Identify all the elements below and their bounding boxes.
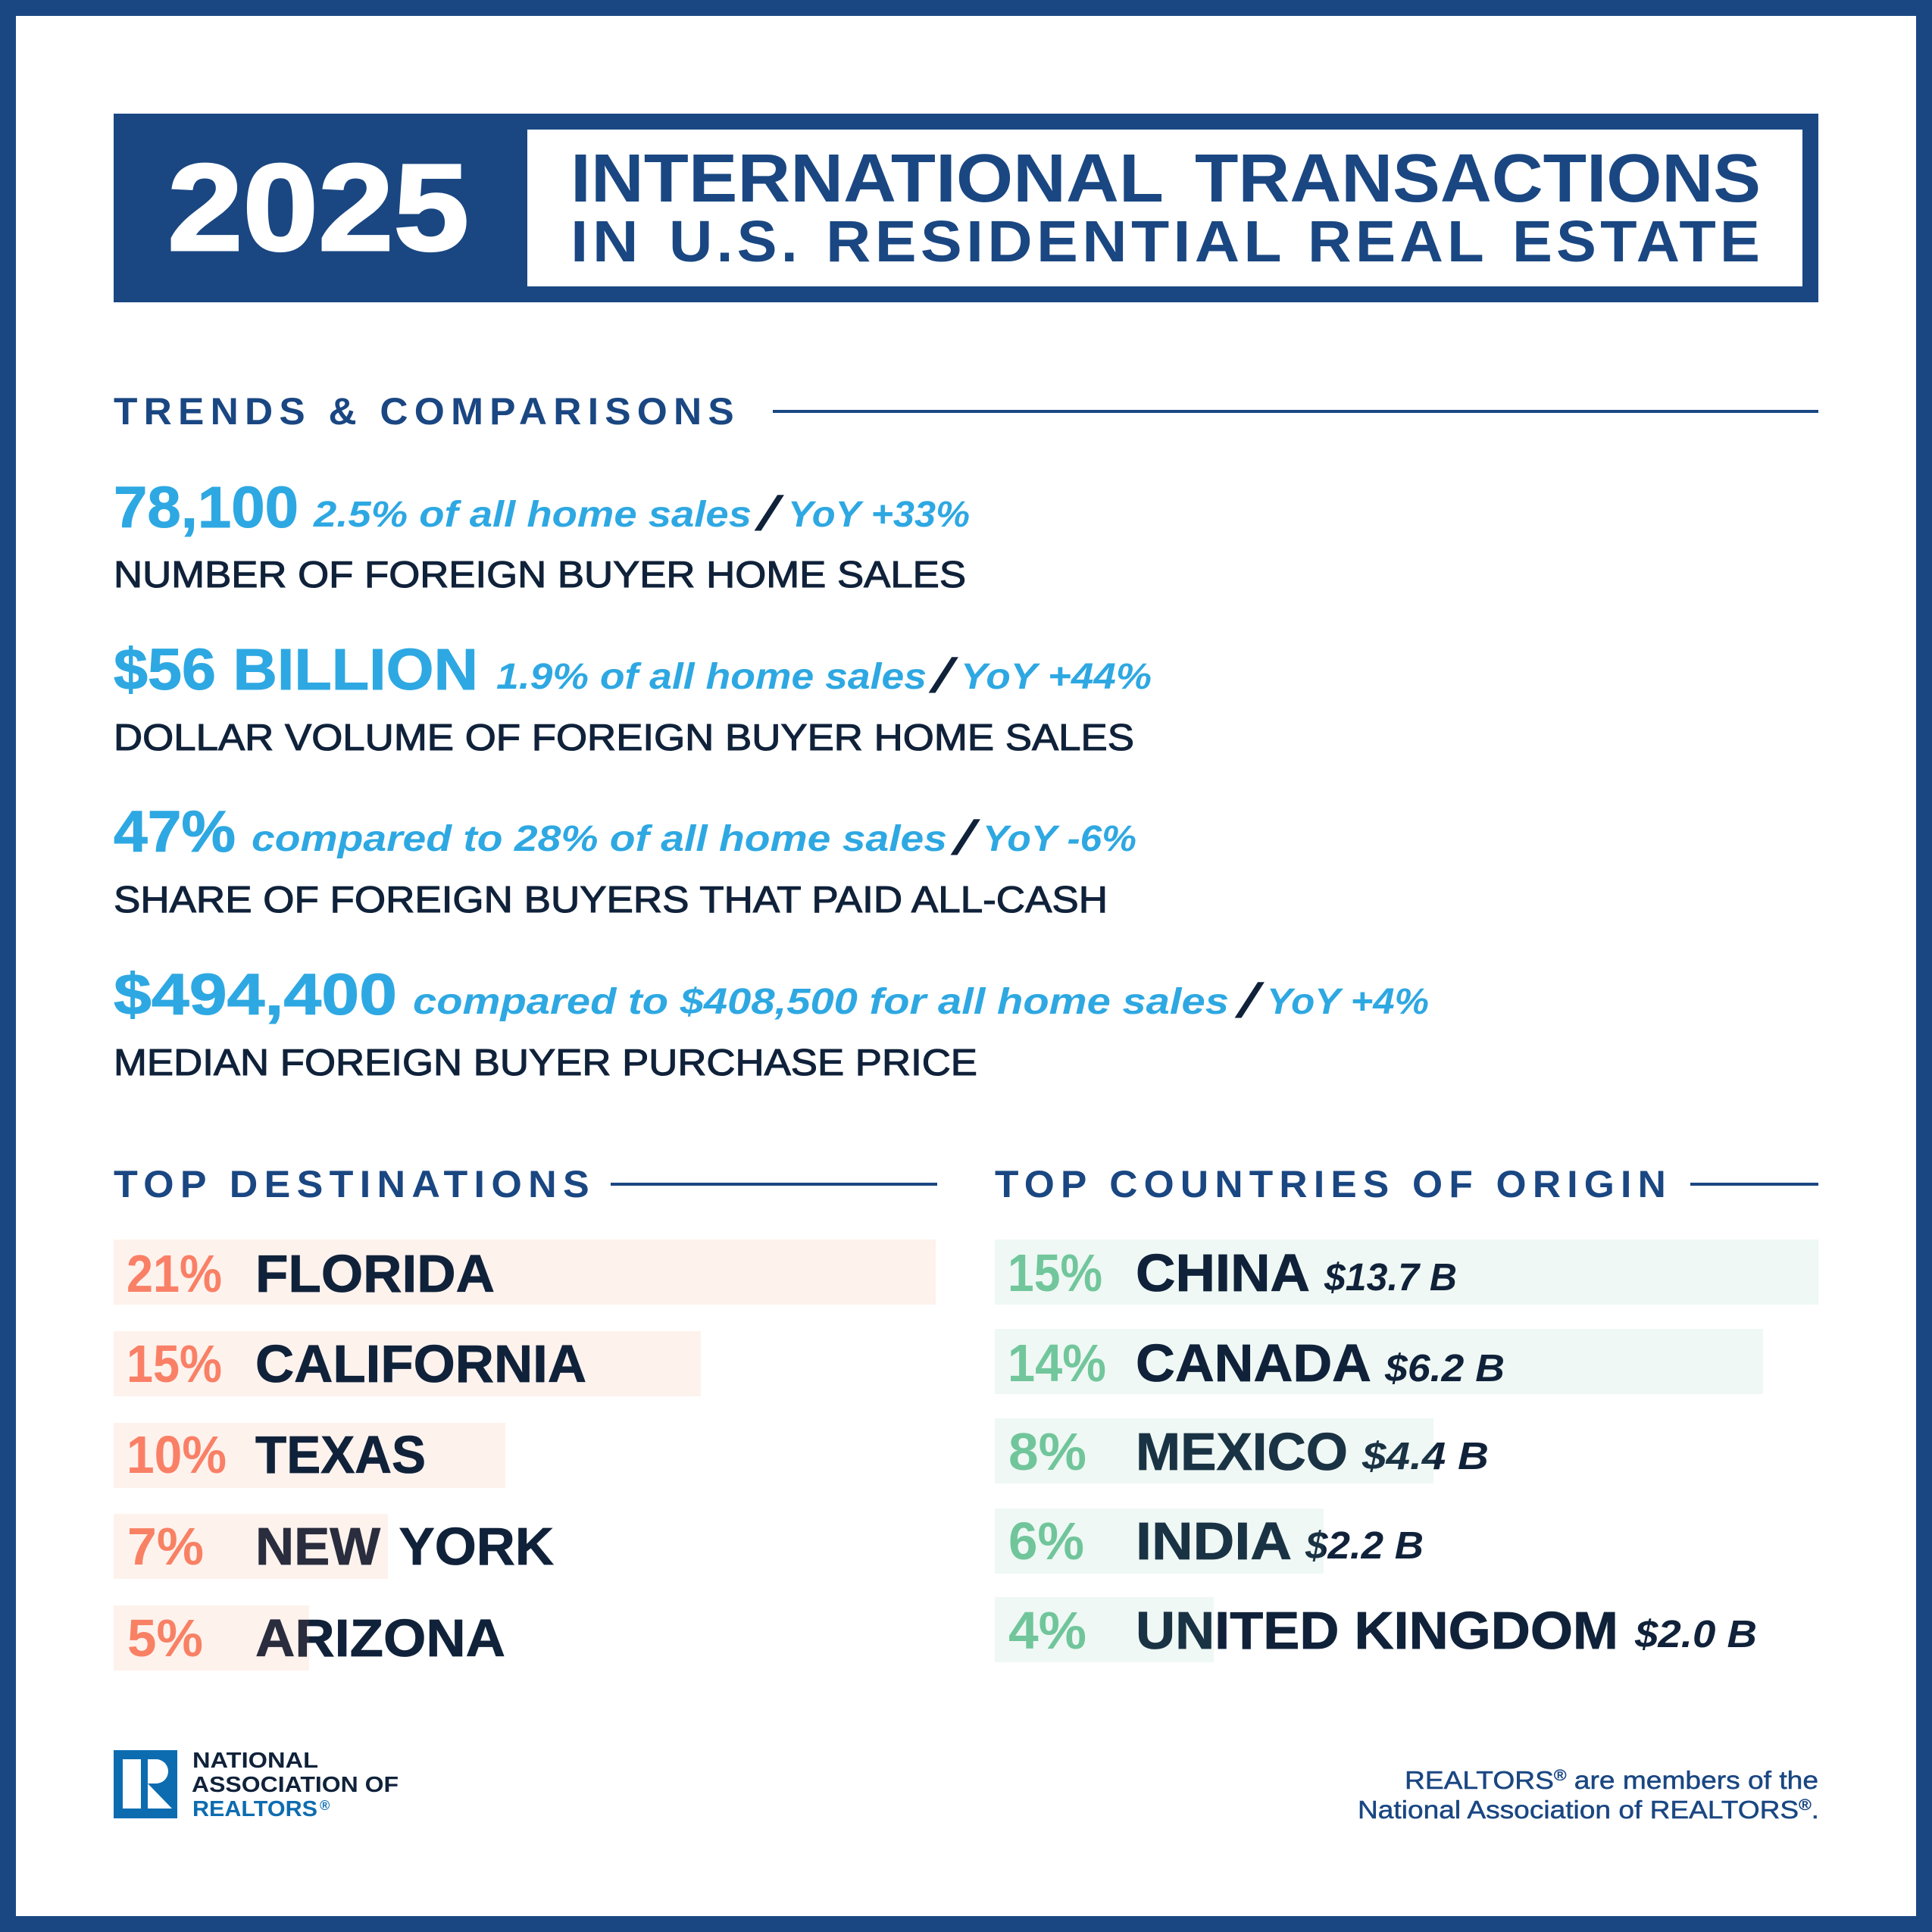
bar: California: CALIFORNIA	[255, 1334, 586, 1393]
stat: all-cash share: 47%	[114, 799, 236, 864]
footer note: ®	[1554, 1768, 1567, 1784]
bar: United Kingdom: 4%	[1008, 1601, 1086, 1660]
bar: Texas: 10%	[127, 1425, 227, 1484]
title line 1: INTERNATIONAL	[571, 141, 1164, 217]
bar: Florida	[114, 1240, 936, 1305]
footer note: ®	[1799, 1797, 1812, 1814]
stat: dollar volume: YoY +44%	[961, 657, 1152, 697]
logo wordmark	[192, 1749, 399, 1821]
title line 1	[571, 141, 1761, 217]
logo wordmark: ASSOCIATION OF	[192, 1773, 399, 1797]
stat: dollar volume	[114, 637, 1152, 758]
bar: Canada: CANADA	[1136, 1333, 1371, 1393]
stat: median purchase price: /	[1235, 975, 1264, 1027]
bar: India	[995, 1508, 1424, 1574]
section: trends and comparisons	[114, 390, 1818, 1083]
footer note: REALTORS	[1405, 1766, 1537, 1794]
bar: Arizona	[114, 1605, 505, 1671]
bar: United Kingdom: $2.0 B	[1634, 1612, 1757, 1655]
bar: California: 15%	[127, 1334, 222, 1393]
bar: Texas: TEXAS	[255, 1425, 426, 1484]
bar: Canada	[995, 1329, 1763, 1394]
bar: Mexico	[995, 1418, 1489, 1483]
footer note	[1358, 1766, 1819, 1824]
stat: foreign buyer home sales	[114, 475, 970, 596]
banner background	[114, 114, 1818, 302]
stat: all-cash share: /	[951, 812, 980, 864]
bar: China: $13.7 B	[1324, 1255, 1457, 1299]
stat: median purchase price: compared to $408,500 for all home sales	[413, 982, 1229, 1022]
bar: California	[114, 1331, 701, 1396]
logo: National Association of Realtors	[114, 1749, 399, 1821]
bar: China: CHINA	[1136, 1243, 1310, 1302]
title line 2: U.S.	[669, 209, 802, 274]
stat: dollar volume: 1.9% of all home sales	[496, 657, 927, 697]
title line 2: IN	[571, 209, 642, 274]
stat: median purchase price: $494,400	[114, 962, 397, 1027]
bar: New York: NEW YORK	[255, 1517, 554, 1576]
stat: median purchase price: MEDIAN FOREIGN BUYER PURCHASE PRICE	[114, 1043, 977, 1083]
bar: United Kingdom: UNITED KINGDOM	[1136, 1601, 1618, 1660]
bar: Florida: 21%	[127, 1244, 222, 1303]
stat: all-cash share	[114, 799, 1136, 921]
stat: foreign buyer home sales: /	[755, 488, 783, 540]
bar: Canada: $6.2 B	[1384, 1346, 1505, 1390]
bar: Canada: 14%	[1008, 1333, 1106, 1393]
stat: all-cash share: compared to 28% of all home sales	[252, 819, 947, 859]
stat: median purchase price: YoY +4%	[1267, 982, 1429, 1022]
title line 2: REAL	[1308, 209, 1488, 274]
stat: all-cash share: YoY -6%	[983, 819, 1136, 859]
panel: top destinations	[114, 1163, 937, 1671]
logo wordmark: NATIONAL	[192, 1749, 318, 1773]
title panel	[527, 130, 1802, 286]
stat: dollar volume: $56 BILLION	[114, 637, 478, 702]
heading: top destinations: TOP DESTINATIONS	[114, 1163, 596, 1205]
title line 2	[571, 209, 1764, 274]
bar: China	[995, 1240, 1818, 1305]
stat: foreign buyer home sales: 2.5% of all home sales	[313, 495, 752, 535]
stat: dollar volume: DOLLAR VOLUME OF FOREIGN BUYER HOME SALES	[114, 717, 1134, 758]
bar: New York	[114, 1514, 554, 1579]
logo wordmark: REALTORS	[192, 1797, 317, 1821]
bar: Mexico: $4.4 B	[1361, 1434, 1489, 1477]
bar: Texas	[114, 1423, 505, 1488]
bar: Arizona: ARIZONA	[255, 1608, 505, 1668]
stat: all-cash share: SHARE OF FOREIGN BUYERS THAT PAID ALL-CASH	[114, 880, 1108, 921]
bar: New York: 7%	[127, 1517, 204, 1576]
bar: Mexico: 8%	[1008, 1422, 1086, 1481]
icon: R block mark	[114, 1750, 177, 1818]
title line 2: RESIDENTIAL	[826, 209, 1286, 274]
bar: Mexico: MEXICO	[1136, 1422, 1348, 1481]
stat: dollar volume: /	[929, 650, 958, 702]
stat: median purchase price	[114, 962, 1429, 1083]
title line 2: ESTATE	[1512, 209, 1764, 274]
bar: Arizona: 5%	[127, 1608, 203, 1668]
stat: foreign buyer home sales: NUMBER OF FOREIGN BUYER HOME SALES	[114, 555, 966, 596]
bar: China: 15%	[1008, 1243, 1102, 1302]
bar: India: INDIA	[1136, 1512, 1292, 1571]
section heading: TRENDS & COMPARISONS	[114, 390, 740, 433]
stat: foreign buyer home sales: YoY +33%	[788, 495, 970, 535]
bar: Florida: FLORIDA	[255, 1244, 495, 1303]
year: 2025	[167, 138, 469, 277]
title banner	[114, 114, 1818, 302]
footer note: are members of the	[1566, 1766, 1818, 1794]
bar: India: $2.2 B	[1305, 1524, 1424, 1567]
logo wordmark: ®	[320, 1798, 330, 1813]
bar: India: 6%	[1008, 1512, 1084, 1571]
title line 1: TRANSACTIONS	[1195, 141, 1761, 217]
panel: top countries of origin	[995, 1163, 1818, 1662]
footer note: National Association of REALTORS	[1358, 1796, 1750, 1824]
bar: United Kingdom	[995, 1597, 1757, 1662]
heading: top countries of origin: TOP COUNTRIES OF ORIGIN	[995, 1163, 1672, 1205]
footer note: .	[1812, 1796, 1819, 1824]
stat: foreign buyer home sales: 78,100	[114, 475, 299, 540]
